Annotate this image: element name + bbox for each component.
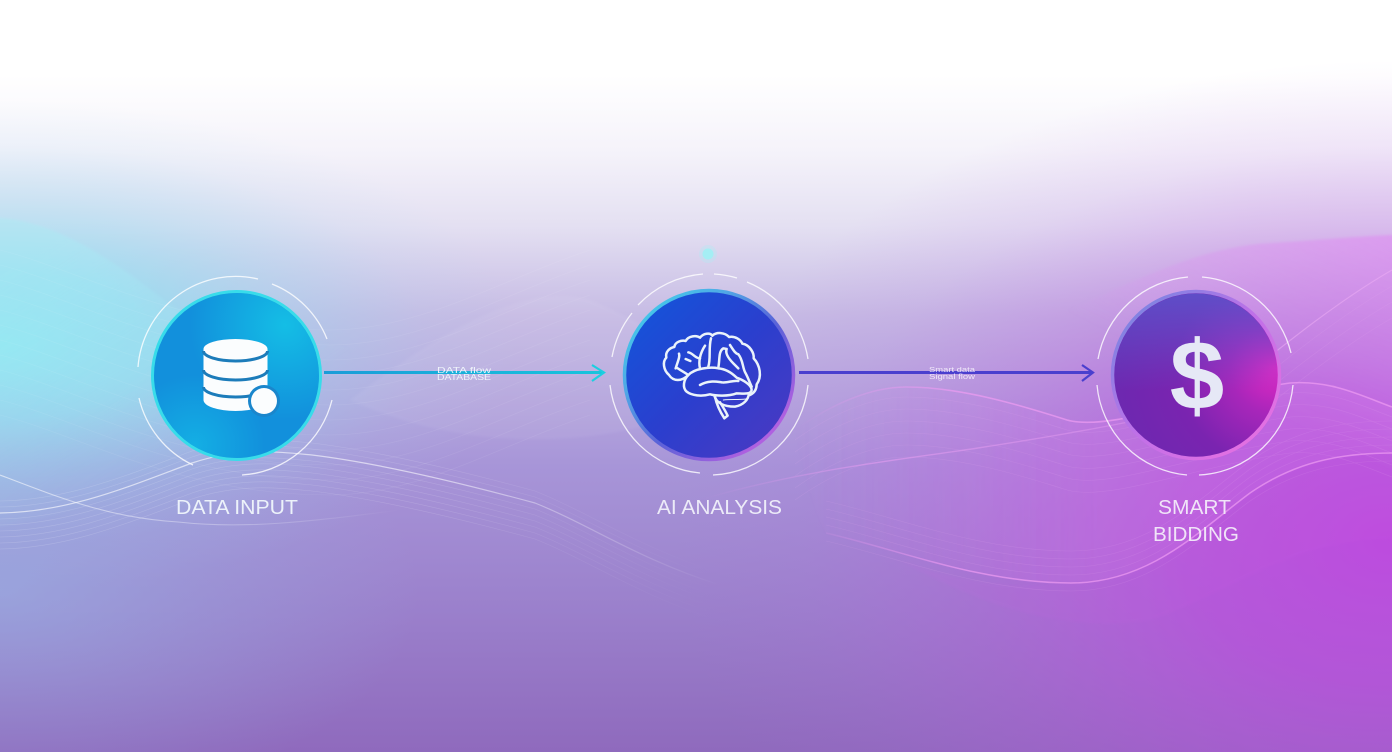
- wave: lower right soft band: [900, 453, 1392, 624]
- circle: smart bidding: [1112, 292, 1280, 458]
- icon: brain: [664, 333, 760, 418]
- wave: left cyan hill: [0, 216, 370, 530]
- wave: centre pale hill: [350, 296, 760, 439]
- wave: upper right magenta hill: [1004, 233, 1392, 520]
- arrow label: first connector: DATA flow: [437, 366, 491, 375]
- wave line: right centre strand: [700, 420, 1138, 500]
- wave line: left bright strand one: [0, 452, 720, 585]
- arrow label: second connector: Signal flow: [929, 374, 976, 381]
- wave lines: right bundle: [795, 286, 1392, 591]
- icon: database: [204, 339, 280, 417]
- arrow label: second connector: [929, 367, 976, 381]
- arrow label: second connector: Smart data: [929, 367, 975, 374]
- ring: AI analysis segments: [610, 274, 808, 475]
- wave: mid right magenta band: [795, 383, 1392, 583]
- step 2: AI analysis: [610, 274, 808, 475]
- label: data input: DATA INPUT: [176, 496, 298, 519]
- wave line: right lower strand: [826, 453, 1392, 583]
- ring: data input segments: [138, 276, 332, 475]
- arrow: AI analysis to smart bidding: [799, 365, 1093, 381]
- label: AI analysis: AI ANALYSIS: [657, 496, 782, 519]
- step 1: data input: [138, 276, 332, 475]
- arrow label: first connector: DATABASE: [437, 373, 491, 382]
- label: smart bidding: SMART: [1158, 496, 1231, 519]
- wave lines: left bundle: [0, 440, 720, 621]
- icon: dollar sign: $: [1170, 320, 1224, 430]
- step 3: smart bidding: [1097, 277, 1293, 475]
- arrow: data input to AI analysis: [324, 365, 604, 381]
- circle highlight: smart bidding top: [1114, 294, 1278, 456]
- circle: data input: [152, 292, 320, 460]
- label: smart bidding: BIDDING: [1153, 523, 1239, 546]
- wave line: right magenta strand: [795, 383, 1392, 430]
- ring: smart bidding segments: [1097, 277, 1293, 475]
- wave line: far right strand: [1240, 270, 1392, 380]
- indicator dot: [699, 245, 717, 263]
- circle: AI analysis: [624, 290, 794, 460]
- arrow label: first connector: [437, 366, 491, 382]
- wave line: left bright strand two: [0, 475, 400, 525]
- wave lines: left faint contour field: [0, 250, 590, 495]
- label: smart bidding: [1153, 496, 1239, 546]
- background waves: [0, 216, 1392, 624]
